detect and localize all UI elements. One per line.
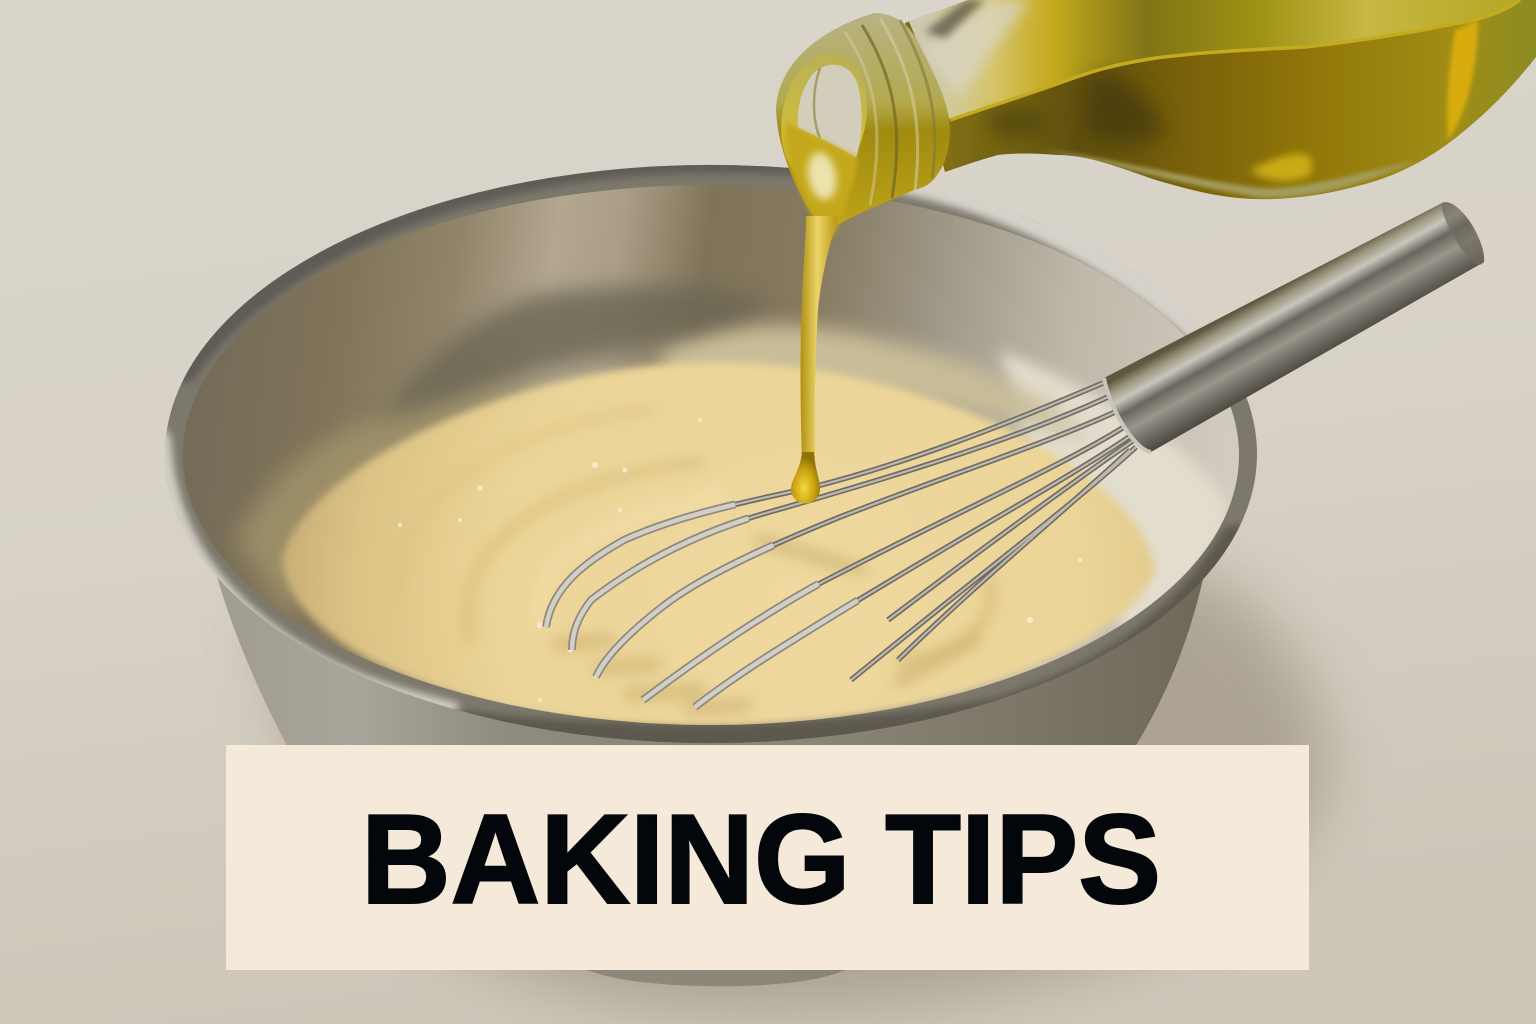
rim dark on upper left — [185, 160, 880, 370]
interior contents — [235, 287, 1228, 727]
olive oil bottle — [771, 0, 1536, 238]
bottle mouth opening — [771, 46, 877, 190]
oil in mouth — [786, 122, 858, 238]
mouth interior view — [798, 65, 862, 158]
batter swirl shadows — [464, 456, 999, 718]
handle end cap — [1442, 202, 1484, 265]
collar edge — [1104, 378, 1151, 452]
oil fill — [900, 0, 1536, 210]
neck threads — [845, 18, 935, 205]
oil drop — [791, 452, 820, 504]
oil stream and drop — [791, 216, 838, 504]
title banner — [226, 745, 1309, 970]
rim shading — [160, 160, 1235, 739]
dark residue band — [375, 287, 770, 435]
bottom edge reflection — [1040, 150, 1420, 198]
oil lip highlight — [804, 150, 840, 202]
whisk wire tips — [546, 383, 1129, 707]
dark glass streak — [925, 0, 985, 38]
bottle neck ring — [776, 13, 950, 224]
batter surface — [282, 362, 1155, 727]
whisk — [546, 202, 1484, 707]
bowl shadow on counter — [260, 570, 1330, 1010]
inner glass edge — [814, 68, 820, 138]
tan wash below residue — [232, 385, 497, 614]
pale batter film on right wall — [1000, 350, 1228, 640]
whisk handle — [1104, 202, 1484, 452]
rim highlight on upper right — [900, 178, 1210, 340]
empty glass upper section — [900, 0, 1520, 120]
rim dark front — [460, 540, 1235, 739]
rim light on lower left — [160, 440, 450, 712]
banner panel — [226, 745, 1309, 970]
title: BAKING TIPS — [361, 788, 1161, 930]
bottle body contents — [900, 0, 1536, 210]
neck glass reflection — [925, 0, 1030, 100]
dark oil reflection near neck — [985, 107, 1050, 140]
batter splatter at edge — [660, 325, 1090, 440]
batter bubbles — [398, 418, 1082, 702]
bowl outer body — [215, 570, 1205, 986]
yellow streak — [1447, 20, 1478, 140]
oil line — [950, 0, 1520, 120]
dark oil reflections — [1085, 74, 1165, 145]
bowl rim — [165, 165, 1257, 743]
whisk wires — [546, 383, 1136, 707]
bowl interior — [183, 185, 1239, 725]
mixing bowl — [160, 160, 1257, 986]
warm glow in oil — [1250, 154, 1312, 181]
oil stream — [800, 216, 838, 460]
